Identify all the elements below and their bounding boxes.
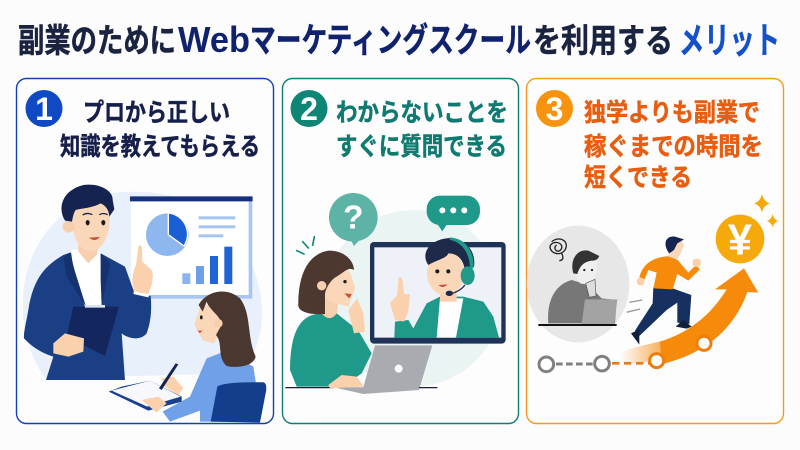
number badge 1: 1 (35, 91, 53, 127)
question bubble: ? (343, 200, 364, 237)
title: Web (178, 19, 250, 60)
title (18, 19, 780, 61)
laptop (333, 345, 432, 394)
number badge 2 (290, 90, 328, 127)
growth arrow (620, 268, 758, 368)
panel: merit 2 (282, 78, 518, 424)
panel: merit 1 (16, 78, 274, 424)
number badge 1 (26, 90, 62, 127)
illustration: instructor teaching a student (23, 185, 266, 423)
illustration: running toward earnings (527, 194, 778, 372)
presentation board (130, 196, 253, 299)
number badge 3: 3 (546, 91, 563, 127)
heading: merit 3 (584, 99, 763, 192)
number badge 3 (536, 90, 573, 127)
heading: merit 3: 短くできる (584, 164, 692, 192)
runner (631, 237, 701, 345)
instructor (24, 185, 153, 380)
heading: merit 2: すぐに質問できる (336, 133, 507, 161)
panel: merit 3 (526, 78, 784, 424)
heading: merit 1: プロから正しい (83, 99, 230, 127)
heading: merit 3: 稼ぐまでの時間を (584, 133, 763, 161)
heading: merit 1 (60, 99, 260, 161)
yen coin (716, 215, 764, 265)
illustration: online question session (285, 193, 506, 394)
heading: merit 1: 知識を教えてもらえる (60, 133, 260, 161)
sparkles (754, 194, 778, 227)
title: マーケティングスクール (250, 22, 531, 60)
desk line (285, 386, 437, 390)
question bubble (329, 193, 378, 246)
self-study figure (527, 226, 629, 342)
title: 副業のために (18, 22, 176, 59)
heading: merit 3: 独学よりも副業で (584, 99, 760, 127)
student (109, 291, 266, 423)
learner (290, 237, 372, 388)
number badge 2: 2 (300, 91, 318, 127)
speed lines (627, 300, 642, 312)
heading: merit 2 (336, 99, 508, 161)
monitor with instructor (370, 237, 506, 344)
yen coin: ¥ (728, 217, 752, 265)
heading: merit 2: わからないことを (336, 99, 508, 127)
ellipsis bubble (427, 196, 480, 231)
title: を利用する (533, 22, 673, 59)
milestone path (539, 356, 649, 372)
